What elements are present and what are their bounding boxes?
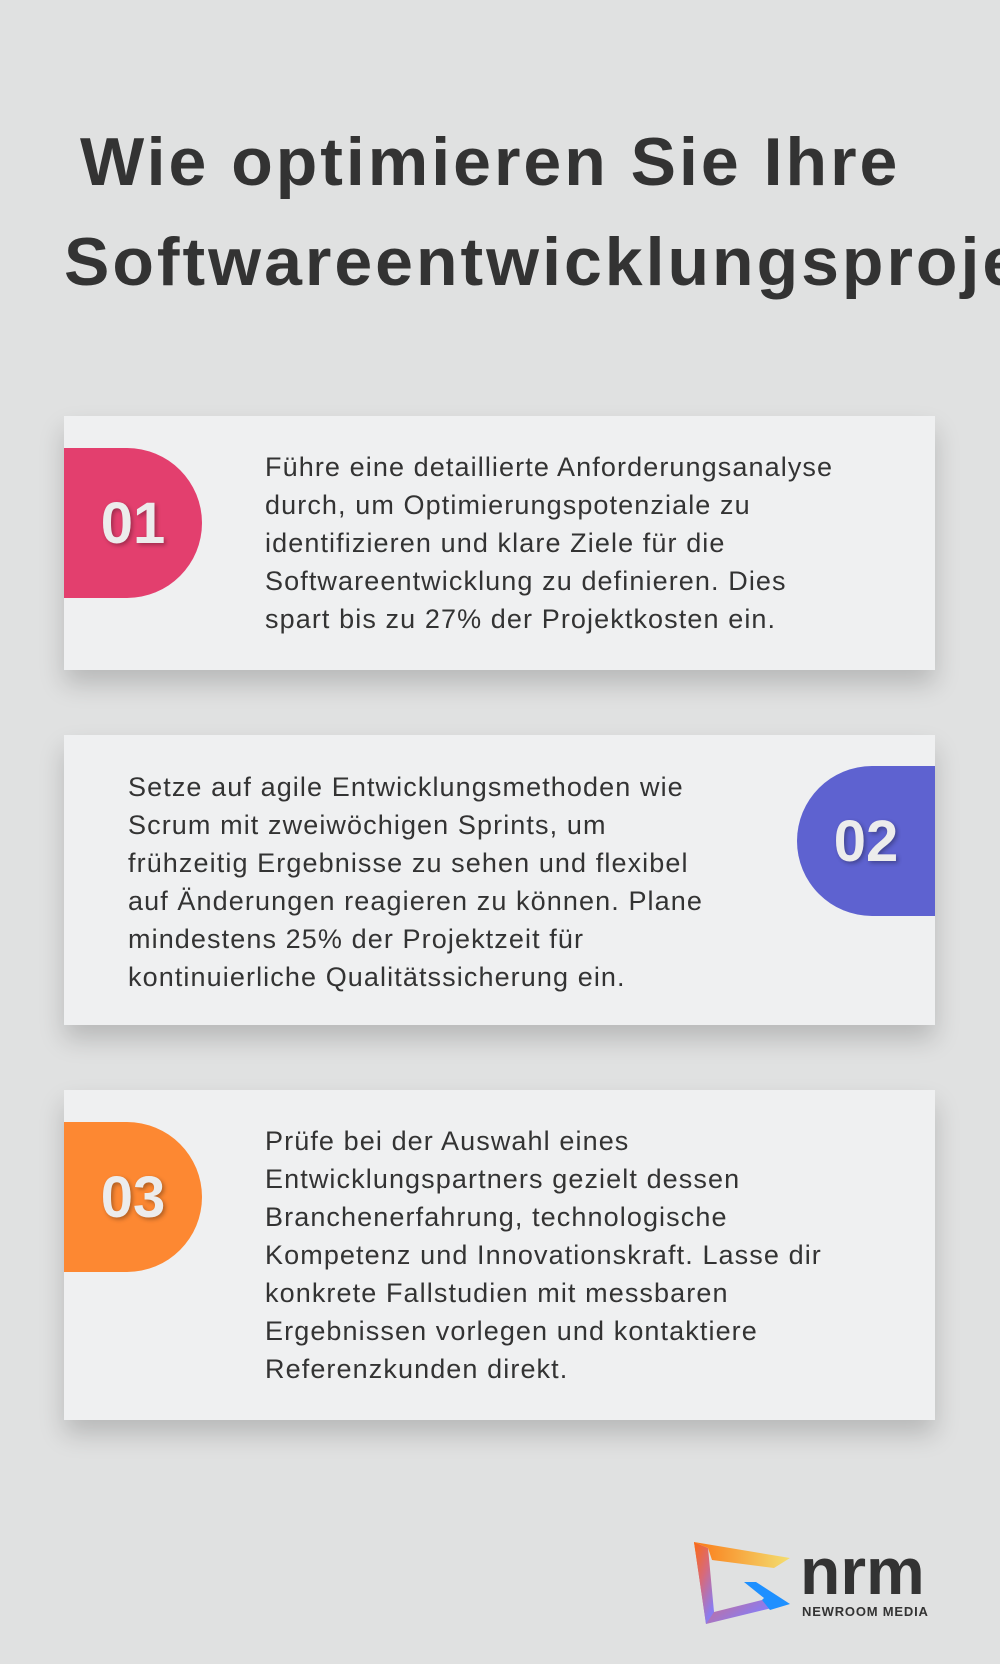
text step 1: durch, um Optimierungspotenziale zu (265, 490, 751, 520)
text step 1: identifizieren und klare Ziele für die (265, 528, 726, 558)
text step 3: Kompetenz und Innovationskraft. Lasse dir (265, 1240, 822, 1270)
text step 2: mindestens 25% der Projektzeit für (128, 924, 584, 954)
text step 3: Ergebnissen vorlegen und kontaktiere (265, 1316, 758, 1346)
text step 3: Referenzkunden direkt. (265, 1354, 568, 1384)
text step 1: Führe eine detaillierte Anforderungsanalyse (265, 452, 833, 482)
text step 1: Softwareentwicklung zu definieren. Dies (265, 566, 787, 596)
panel: step 1 (64, 416, 935, 670)
badge 03: 03 (101, 1164, 165, 1230)
panel: step 2 (64, 735, 935, 1025)
icon: logo mark (694, 1542, 790, 1624)
badge 01: 01 (101, 490, 165, 556)
logo (694, 1534, 929, 1624)
text step 2: auf Änderungen reagieren zu können. Plane (128, 886, 703, 916)
badge 03 (64, 1122, 202, 1272)
logo text: nrm (800, 1534, 925, 1608)
text step 3: Branchenerfahrung, technologische (265, 1202, 728, 1232)
text step 2: Scrum mit zweiwöchigen Sprints, um (128, 810, 607, 840)
text step 1: spart bis zu 27% der Projektkosten ein. (265, 604, 776, 634)
badge 01 (64, 448, 202, 598)
text step 2: Setze auf agile Entwicklungsmethoden wie (128, 772, 684, 802)
text step 3 (265, 1126, 822, 1384)
panel: step 3 (64, 1090, 935, 1420)
text step 2: kontinuierliche Qualitätssicherung ein. (128, 962, 626, 992)
title: Wie optimieren Sie Ihre (80, 124, 900, 200)
text step 3: Prüfe bei der Auswahl eines (265, 1126, 629, 1156)
text step 1 (265, 452, 833, 634)
text step 2 (128, 772, 703, 992)
title (64, 124, 1000, 300)
logo: NEWROOM MEDIA (802, 1604, 929, 1619)
text step 2: frühzeitig Ergebnisse zu sehen und flexibel (128, 848, 689, 878)
badge 02: 02 (834, 808, 898, 874)
text step 3: Entwicklungspartners gezielt dessen (265, 1164, 740, 1194)
text step 3: konkrete Fallstudien mit messbaren (265, 1278, 729, 1308)
badge 02 (797, 766, 935, 916)
